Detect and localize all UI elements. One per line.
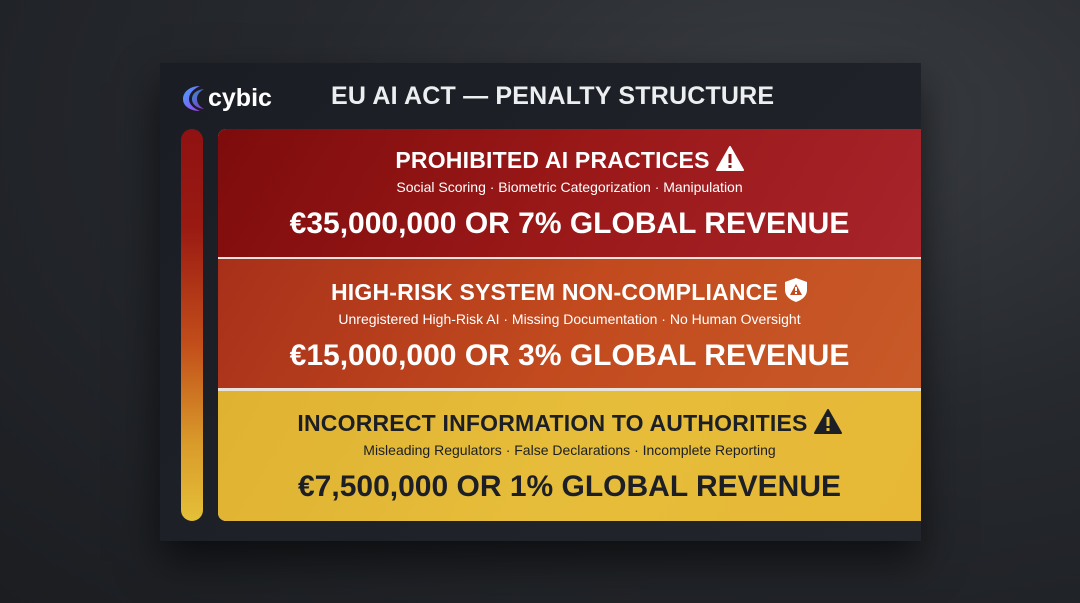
band separators background xyxy=(218,129,921,521)
logo: cybic xyxy=(208,84,272,112)
panel: incorrect information: €7,500,000 OR 1% GLOBAL REVENUE xyxy=(298,470,841,503)
card xyxy=(160,63,921,541)
panel: high-risk: €15,000,000 OR 3% GLOBAL REVENUE xyxy=(290,339,849,372)
panel: high-risk: Unregistered High-Risk AI · Missing Documentation · No Human Oversight xyxy=(338,311,801,327)
panel: prohibited: Social Scoring · Biometric Categorization · Manipulation xyxy=(396,179,743,195)
icon: logo swirl xyxy=(183,86,204,111)
panel: prohibited: €35,000,000 OR 7% GLOBAL REVENUE xyxy=(290,207,849,240)
panel: incorrect information xyxy=(218,391,921,521)
panel: incorrect information: INCORRECT INFORMATION TO AUTHORITIES xyxy=(297,410,808,436)
panel: incorrect information: Misleading Regulators · False Declarations · Incomplete Reporting xyxy=(363,442,776,458)
panel: high-risk xyxy=(218,259,921,388)
title: EU AI ACT — PENALTY STRUCTURE xyxy=(331,82,774,110)
panel: high-risk: HIGH-RISK SYSTEM NON-COMPLIANCE xyxy=(331,279,778,305)
panel: prohibited: PROHIBITED AI PRACTICES xyxy=(395,147,710,173)
panel: prohibited xyxy=(218,129,921,257)
severity bar xyxy=(181,129,203,521)
